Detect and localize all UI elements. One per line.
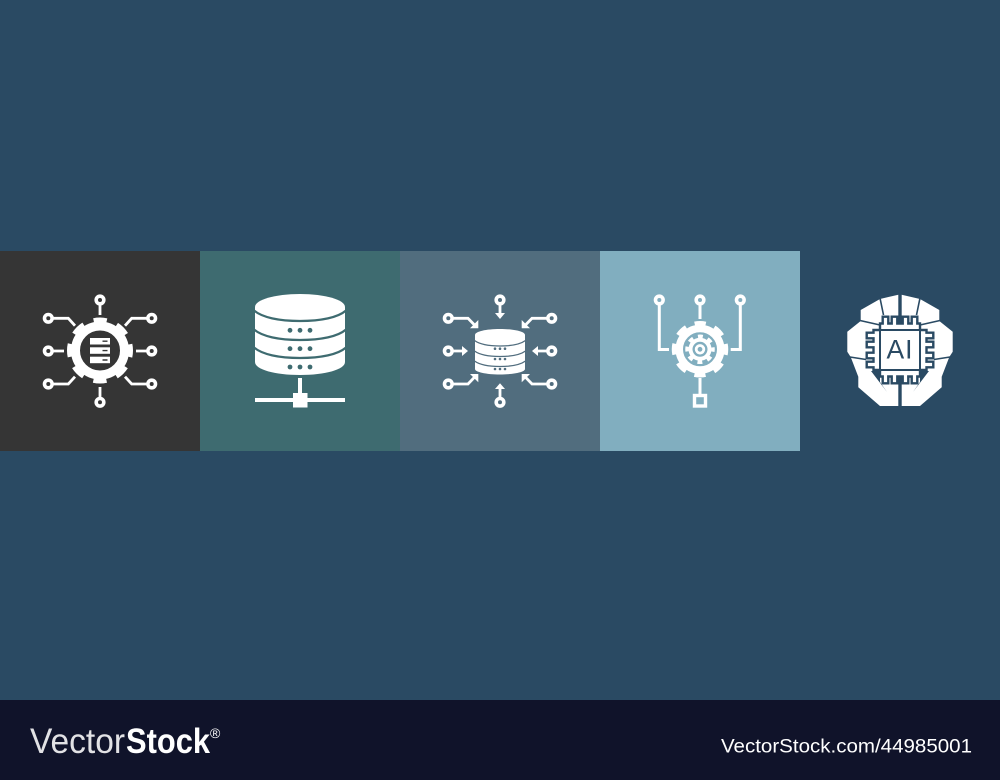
icon: database on network <box>254 294 346 408</box>
icon: AI chip brain <box>847 295 953 406</box>
text: AI label: AI <box>886 334 914 364</box>
panel: data gear tile <box>0 251 200 451</box>
panel: data inputs tile <box>400 251 600 451</box>
logo: VectorStock wordmark: Vector <box>30 722 125 761</box>
icon: database with incoming arrows <box>444 296 556 406</box>
footer bar <box>0 700 1000 780</box>
logo: registered mark: ® <box>210 725 221 741</box>
icon: gear with three inputs and one output <box>656 296 744 406</box>
logo: VectorStock wordmark: Stock <box>126 722 210 761</box>
icon: gear with server and circuit nodes <box>44 296 156 406</box>
panel: database network tile <box>200 251 400 451</box>
logo: VectorStock wordmark <box>30 722 210 761</box>
text: image reference: VectorStock.com/44985001 <box>721 736 972 758</box>
panel: processing gear tile <box>600 251 800 451</box>
